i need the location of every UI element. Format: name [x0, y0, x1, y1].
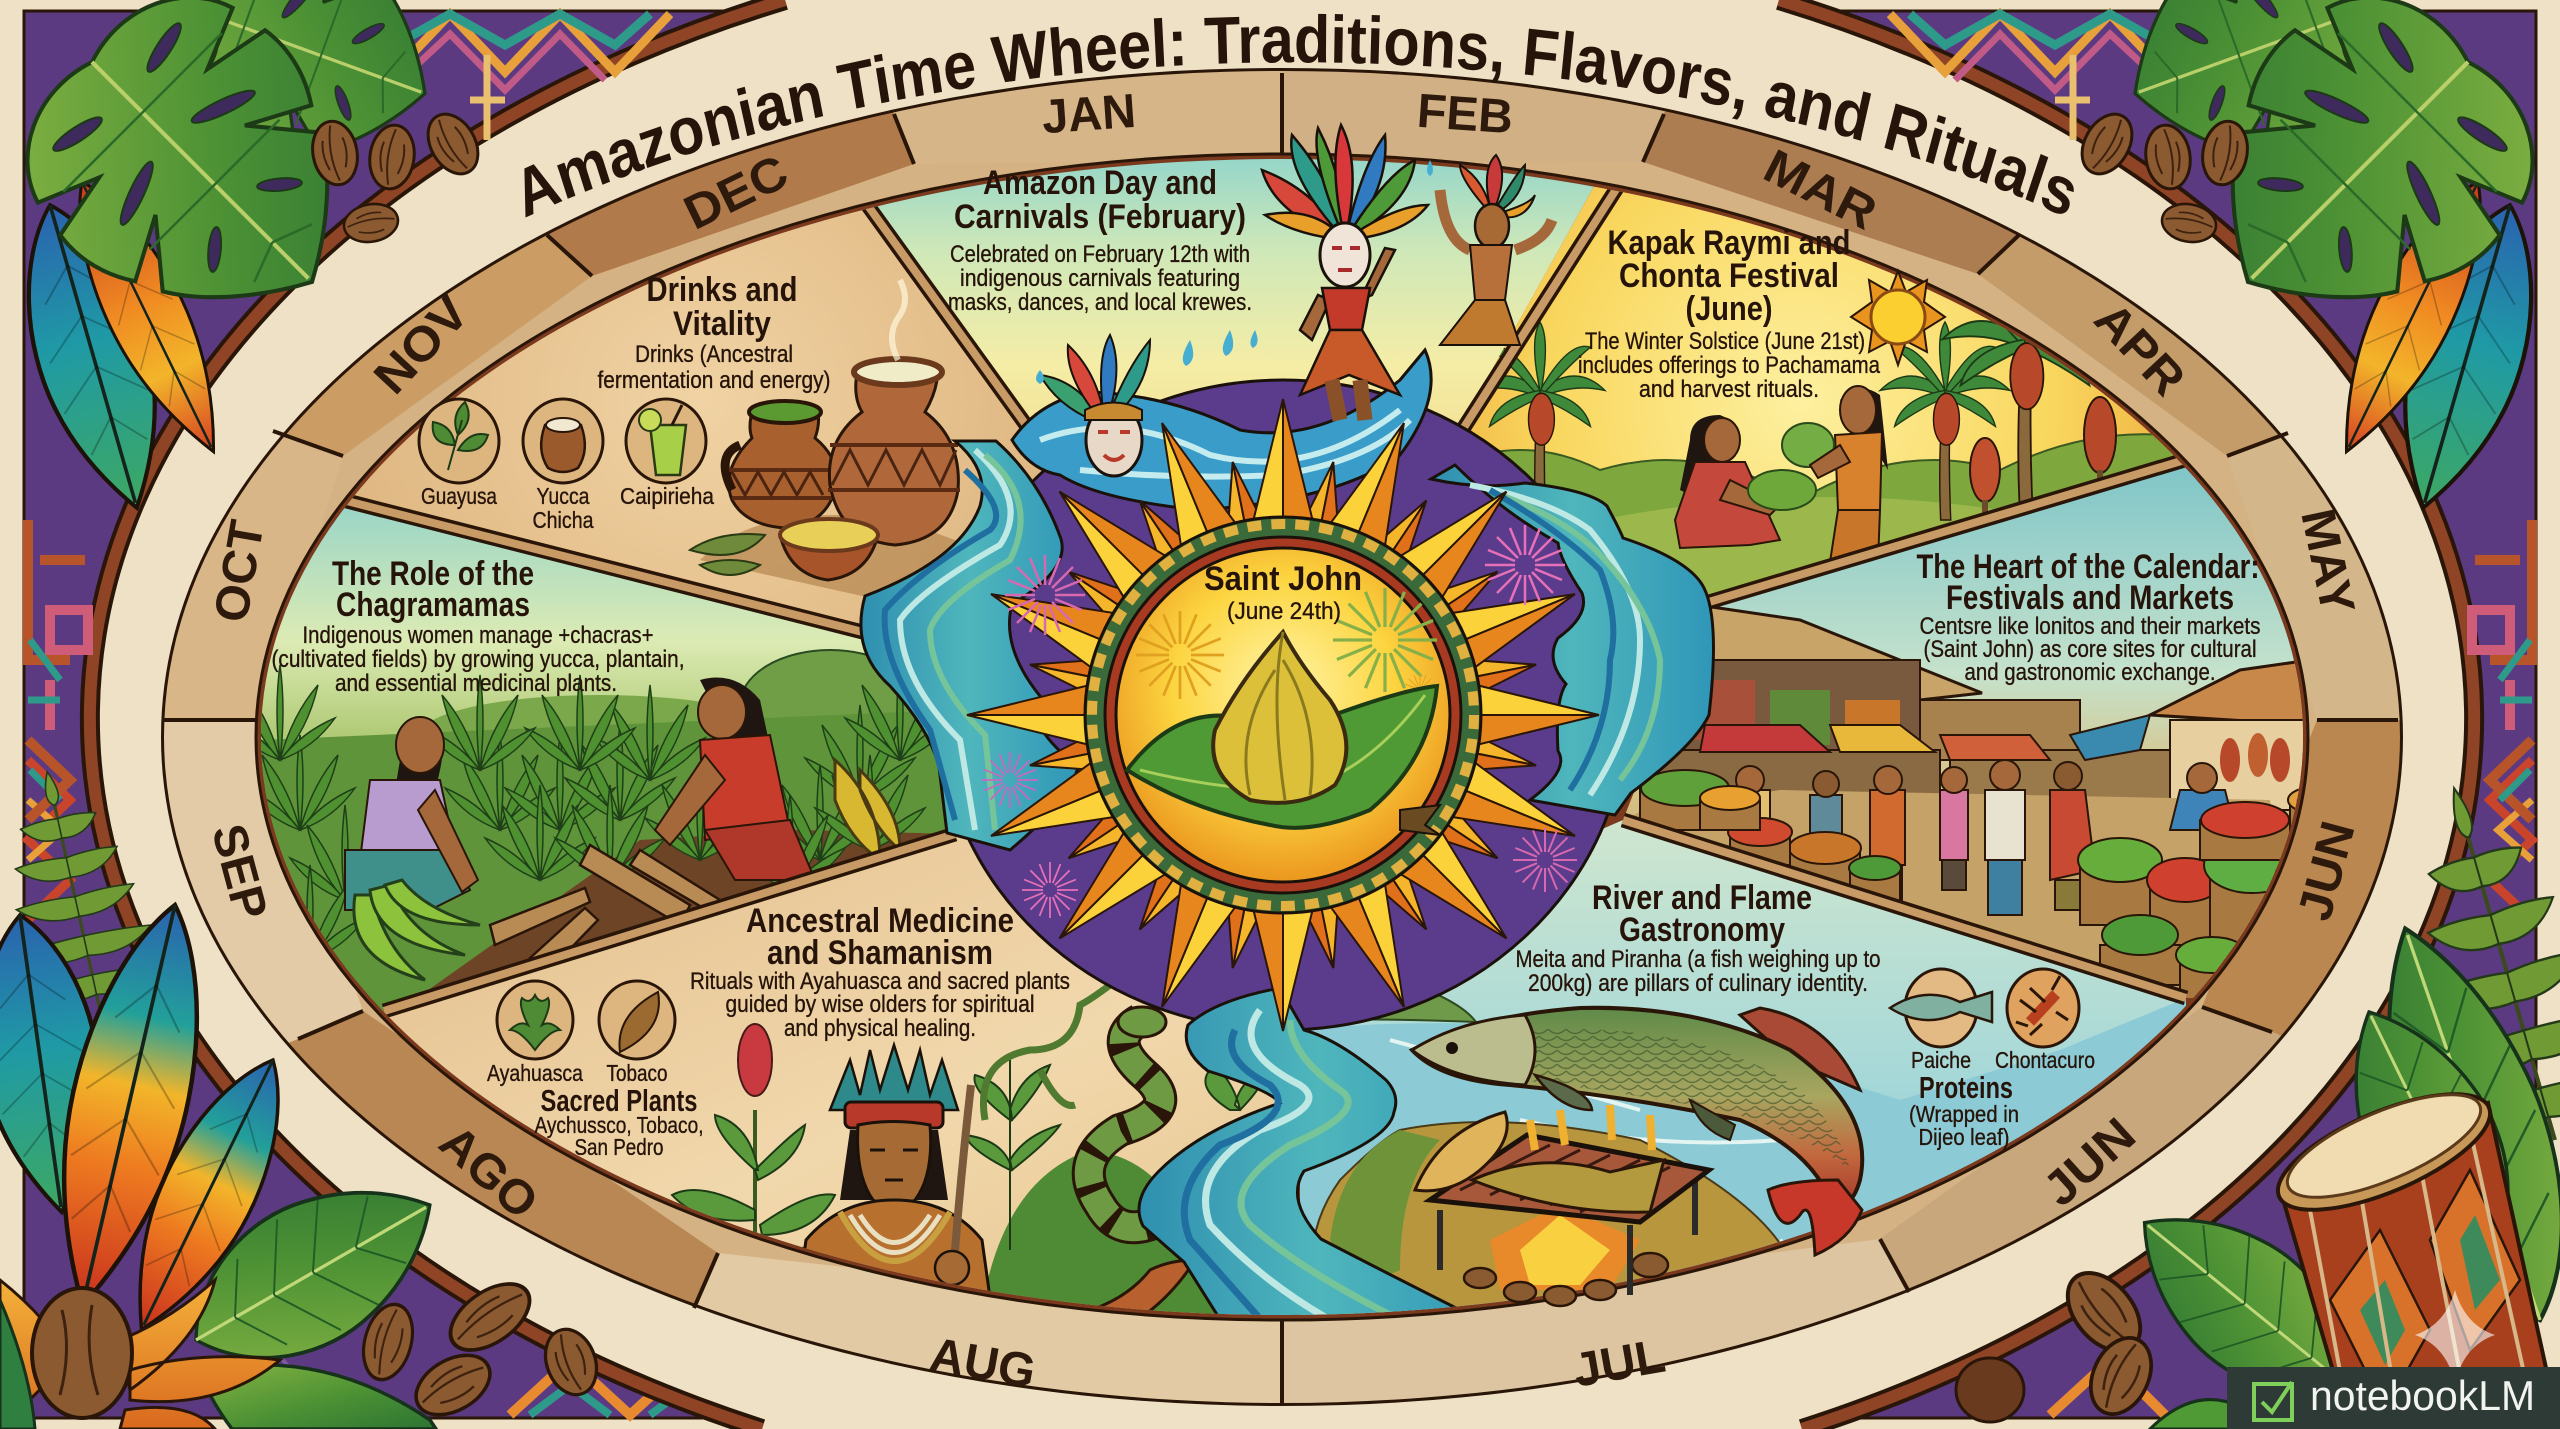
- panel: ancestral medicine: [384, 837, 1290, 1315]
- month labels: AUG: [926, 1328, 1039, 1399]
- icon: caipirinha: [626, 399, 706, 483]
- proteins labels: [1909, 1047, 2095, 1150]
- produce crates: [1640, 770, 2352, 1005]
- panel text: kapak raymi: Chonta Festival: [1619, 257, 1839, 295]
- icon: chontacuro: [2007, 969, 2079, 1047]
- watermark star: [2415, 1290, 2495, 1382]
- icon: tobacco: [599, 981, 675, 1059]
- panel text: amazon day and carnivals: Amazon Day and: [983, 164, 1217, 202]
- panel text: river and flame: [1516, 879, 1880, 997]
- label: yucca chicha: Chicha: [532, 507, 594, 533]
- panel text: amazon day and carnivals: masks, dances, and local krewes.: [948, 289, 1252, 316]
- panel text: chagramamas: and essential medicinal plants.: [335, 670, 617, 697]
- panel text: chagramamas: [272, 555, 684, 697]
- panel text: heart of the calendar: and gastronomic exchange.: [1964, 659, 2216, 686]
- panel text: river and flame: Gastronomy: [1619, 911, 1785, 949]
- fireworks on purple: [982, 525, 1577, 918]
- month labels: DEC: [676, 146, 796, 241]
- panel text: ancestral medicine: and physical healing.: [784, 1015, 976, 1042]
- panel text: kapak raymi: includes offerings to Pachamama: [1578, 352, 1881, 379]
- panel text: drinks and vitality: Vitality: [673, 305, 771, 343]
- panel text: kapak raymi: Kapak Raymi and: [1608, 224, 1850, 262]
- earth shore: [1312, 1122, 1790, 1330]
- sacred plants labels: Ayahuasca: [487, 1060, 583, 1086]
- notebookLM badge: notebookLM: [2310, 1372, 2535, 1419]
- label: yucca chicha: [532, 483, 594, 533]
- snake: [1089, 1020, 1160, 1227]
- proteins labels: Paiche: [1911, 1047, 1971, 1073]
- panel text: heart of the calendar: The Heart of the Calendar:: [1916, 548, 2260, 586]
- proteins labels: Chontacuro: [1995, 1047, 2095, 1073]
- center text: saint john: [1204, 560, 1362, 625]
- panel text: river and flame: Meita and Piranha (a fish weighing up to: [1516, 946, 1880, 973]
- kneeling woman with greens: [1675, 415, 1816, 548]
- label: guayusa: Guayusa: [421, 483, 497, 509]
- main dancer: [1262, 125, 1428, 420]
- month labels: MAY: [2290, 504, 2364, 619]
- vine: [983, 985, 1110, 1120]
- panel text: heart of the calendar: Centsre like lonitos and their markets: [1920, 613, 2260, 640]
- month labels: JUN: [2288, 816, 2366, 926]
- panel text: drinks and vitality: [598, 271, 830, 394]
- corner ornament: bottom-right leaves and nuts: [1956, 765, 2560, 1429]
- central sun disc: [1085, 517, 1481, 913]
- panel text: kapak raymi: (June): [1686, 290, 1772, 328]
- icon: yucca chicha: [523, 399, 603, 483]
- water droplets: [1036, 160, 1433, 384]
- panel text: amazon day and carnivals: [948, 164, 1252, 316]
- awnings: [1700, 715, 2150, 760]
- proteins labels: (Wrapped in: [1909, 1101, 2019, 1127]
- panel: chagramamas: [261, 502, 865, 1011]
- panel text: ancestral medicine: Rituals with Ayahuasca and sacred plants: [690, 968, 1070, 995]
- yellow bananas on the right: [835, 760, 900, 860]
- month labels: FEB: [1415, 85, 1515, 144]
- right river: [1431, 465, 1713, 815]
- month labels: [201, 85, 2366, 1399]
- month labels: MAR: [1755, 140, 1885, 241]
- month labels: JUL: [1569, 1330, 1669, 1398]
- title: Amazonian Time Wheel: Traditions, Flavors, and Rituals: [524, 14, 2074, 218]
- panel text: heart of the calendar: (Saint John) as core sites for cultural: [1924, 636, 2256, 663]
- amazon panel water swirl: [1012, 350, 1431, 510]
- panel text: chagramamas: The Role of the: [332, 555, 534, 593]
- month labels: OCT: [205, 516, 275, 626]
- wheel panels: [261, 159, 2303, 1315]
- shaman: [796, 1045, 992, 1312]
- proteins labels: Proteins: [1919, 1070, 2013, 1105]
- illustration: market stalls and shoppers: [1623, 606, 2352, 1005]
- panel text: ancestral medicine: guided by wise olders for spiritual: [726, 991, 1034, 1018]
- icon: guayusa: [419, 399, 499, 483]
- background market row: [1640, 700, 2170, 810]
- center text: saint john: Saint John: [1204, 560, 1362, 598]
- crowd: [1730, 760, 2235, 915]
- month labels: AGO: [429, 1115, 548, 1230]
- green undergrowth: [980, 1150, 1240, 1335]
- panel text: chagramamas: (cultivated fields) by growing yucca, plantain,: [272, 646, 684, 673]
- month labels: SEP: [201, 819, 277, 925]
- panel text: amazon day and carnivals: Carnivals (February): [954, 198, 1246, 236]
- proteins labels: Dijeo leaf): [1918, 1124, 2010, 1150]
- icon: drum: [2263, 1071, 2553, 1429]
- month labels: JAN: [1040, 85, 1138, 144]
- second dancer: [1440, 155, 1552, 345]
- icon: kapak sun: [1851, 271, 1945, 365]
- illustration: river scene with arapaima and grill: [1300, 995, 2186, 1315]
- month labels: NOV: [364, 286, 479, 404]
- corner ornament: bottom-left feathers, leaves and nuts: [0, 757, 605, 1429]
- panel: drinks: [350, 208, 1042, 624]
- panel: kapak raymi: [1471, 186, 2174, 490]
- panel text: ancestral medicine: Ancestral Medicine: [746, 902, 1014, 940]
- corner ornament: top-left monstera, feathers and seeds: [0, 0, 670, 820]
- panel text: heart of the calendar: Festivals and Markets: [1946, 579, 2234, 617]
- thatched stall: [1664, 606, 1982, 750]
- illustration: grill with fish and fire: [1415, 1105, 1709, 1306]
- panel text: kapak raymi: [1578, 224, 1881, 403]
- panel text: drinks and vitality: Drinks (Ancestral: [635, 341, 793, 368]
- sacred plants labels: Sacred Plants: [540, 1083, 698, 1118]
- standing man with crop: [1782, 386, 1888, 562]
- month labels: APR: [2084, 293, 2195, 406]
- sun rays: [967, 399, 1599, 1031]
- small pot: [725, 401, 838, 528]
- bananas: [354, 880, 480, 980]
- large pot: [828, 280, 960, 545]
- panel dividers: [331, 166, 2198, 1011]
- sacred plants labels: [487, 1060, 704, 1160]
- central purple medallion: [938, 380, 1628, 1030]
- panel text: ancestral medicine: [690, 902, 1070, 1042]
- water: [1300, 998, 2186, 1340]
- panel text: chagramamas: Chagramamas: [336, 586, 530, 624]
- corner ornament: top-right monstera, feathers and seeds: [1890, 0, 2560, 820]
- panel text: kapak raymi: The Winter Solstice (June 21st): [1585, 328, 1865, 355]
- panel text: river and flame: River and Flame: [1592, 879, 1812, 917]
- icon: paiche: [1890, 969, 1992, 1047]
- illustration: kapak raymi harvest scene: [1440, 252, 2200, 610]
- icon: saint john juane leaf bundle: [1127, 632, 1440, 835]
- sacred plants labels: Aychussco, Tobaco,: [534, 1112, 704, 1138]
- green riverbank: [1296, 977, 1476, 1022]
- panel text: drinks and vitality: Drinks and: [646, 271, 798, 309]
- right thatched stall: [2150, 660, 2310, 810]
- illustration: shaman with plants and snake: [660, 985, 1265, 1336]
- month labels: JUN: [2033, 1108, 2146, 1217]
- sacred plants labels: San Pedro: [574, 1134, 664, 1160]
- panel text: ancestral medicine: and Shamanism: [767, 934, 993, 972]
- label: caipirinha: Caipirieha: [620, 483, 714, 509]
- notebookLM badge: [2227, 1367, 2560, 1429]
- illustration: chagra field with women planting: [225, 650, 960, 1011]
- panel: amazon day: [870, 159, 1594, 423]
- plants: [672, 1060, 1265, 1280]
- label: yucca chicha: Yucca: [536, 483, 590, 509]
- icon: notebook check: [2254, 1382, 2292, 1420]
- mask in water: [1040, 335, 1150, 476]
- center text: saint john: (June 24th): [1227, 598, 1341, 625]
- panel text: amazon day and carnivals: indigenous carnivals featuring: [960, 265, 1240, 292]
- panel: river and flame: [1300, 820, 2186, 1340]
- bottom river: [1139, 988, 1500, 1340]
- panel: heart of the calendar: [1623, 462, 2303, 998]
- woman weeding, right: [655, 678, 815, 880]
- illustration: arapaima fish: [1412, 1008, 1862, 1255]
- panel text: amazon day and carnivals: Celebrated on February 12th with: [950, 241, 1250, 268]
- panel text: drinks and vitality: fermentation and energy): [598, 367, 830, 394]
- sacred plants labels: Tobaco: [606, 1060, 668, 1086]
- illustration: carnival dancers: [1036, 125, 1552, 476]
- icon: ayahuasca: [497, 981, 573, 1059]
- left river: [861, 441, 1078, 850]
- woman planting, left: [345, 716, 478, 910]
- panel text: chagramamas: Indigenous women manage +chacras+: [302, 622, 654, 649]
- panel text: river and flame: 200kg) are pillars of culinary identity.: [1528, 970, 1868, 997]
- panel text: heart of the calendar: [1916, 548, 2260, 686]
- panel text: kapak raymi: and harvest rituals.: [1639, 376, 1819, 403]
- bowl: [780, 519, 878, 580]
- illustration: pots and drink vessels: [690, 280, 1010, 610]
- yucca roots: [488, 843, 720, 958]
